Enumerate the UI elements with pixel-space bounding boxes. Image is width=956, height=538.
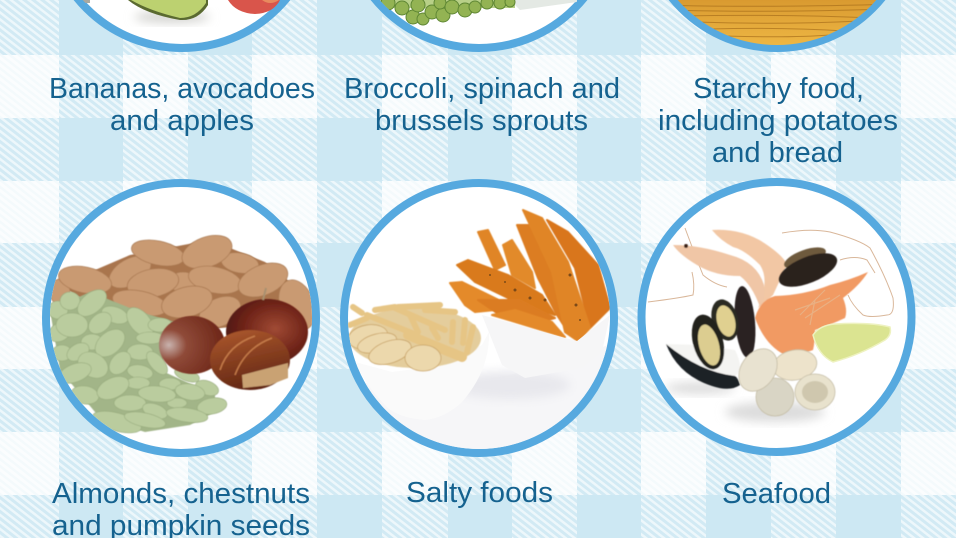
photo circle: nuts and seeds	[45, 183, 322, 453]
almonds	[70, 242, 289, 329]
crackers	[349, 305, 481, 368]
caption: Seafood	[722, 478, 831, 510]
caption: and bread	[712, 137, 843, 169]
caption	[49, 73, 315, 137]
top mussel	[778, 246, 838, 288]
caption: Almonds, chestnuts	[52, 478, 310, 510]
caption: brussels sprouts	[375, 105, 588, 137]
photo circle: crackers and sweet potato fries	[340, 183, 620, 460]
clams	[738, 348, 836, 417]
lime wedge	[813, 323, 890, 362]
caption: Salty foods	[406, 477, 553, 509]
caption: and apples	[110, 105, 254, 137]
sweet potato fries	[450, 210, 610, 341]
pale prawns	[673, 230, 868, 355]
panel: starchy food	[660, 0, 897, 162]
caption: Broccoli, spinach and	[344, 73, 620, 105]
caption	[658, 73, 898, 169]
photo circle: golden pasta	[668, 0, 886, 52]
caption	[52, 478, 310, 538]
caption: Bananas, avocadoes	[49, 73, 315, 105]
antennae	[648, 228, 893, 316]
white round bowl	[356, 362, 480, 396]
panel: seafood	[642, 182, 912, 510]
white angular bowl	[482, 315, 610, 378]
photo circle: avocado and apple	[74, 0, 290, 52]
panel: bananas, avocadoes and apples	[47, 0, 317, 137]
caption: Starchy food,	[693, 73, 864, 105]
black mussels	[666, 285, 758, 389]
caption: including potatoes	[658, 105, 898, 137]
panel: salty foods	[340, 183, 620, 509]
caption	[344, 73, 620, 137]
table shading	[365, 345, 608, 449]
photo circle: prawns, mussels, clams and lime	[642, 182, 912, 452]
panel: broccoli, spinach and brussels sprouts	[344, 0, 620, 137]
pumpkin seeds	[50, 292, 215, 432]
photo circle: green vegetables	[370, 0, 588, 52]
panel: almonds, chestnuts and pumpkin seeds	[45, 183, 322, 538]
chestnuts	[159, 288, 308, 390]
orange prawn	[755, 272, 868, 355]
